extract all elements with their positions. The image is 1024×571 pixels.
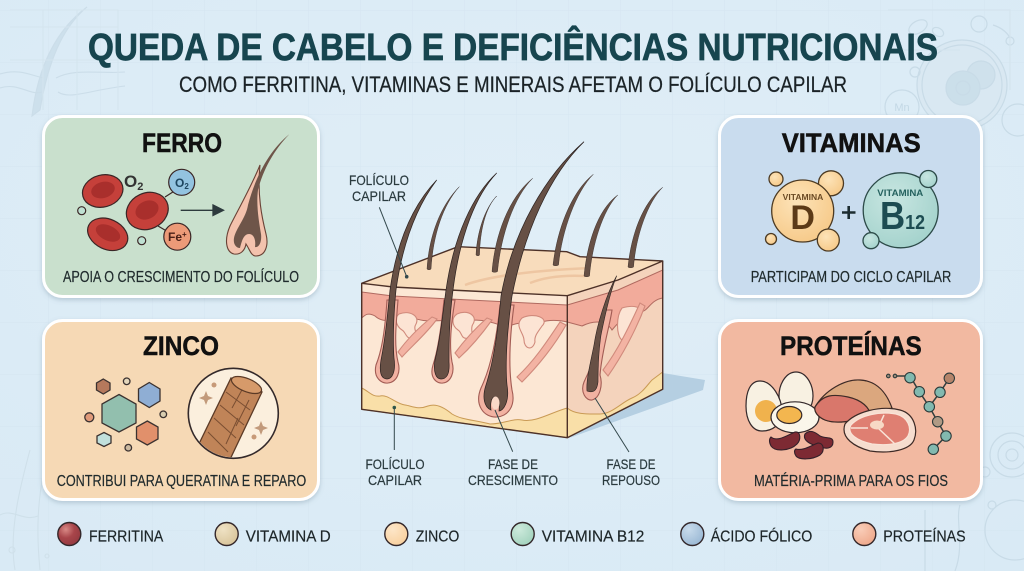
icon: red blood cells with oxygen and iron: [78, 169, 195, 257]
follicle: large growth phase: [479, 142, 584, 417]
label: O2: 2: [137, 181, 143, 193]
icon: vitamin D capsule: [766, 171, 844, 251]
follicle: right resting phase: [583, 276, 617, 400]
panel: ferro: [44, 116, 318, 296]
label: O2 bubble: O: [175, 176, 184, 190]
legend item: ferritina: [58, 522, 164, 546]
legend item: proteinas: PROTEÍNAS: [883, 526, 966, 546]
label: Fe: +: [182, 230, 187, 239]
icon: plus sign: [842, 206, 856, 219]
heading: zinco: ZINCO: [143, 331, 219, 361]
label: fase de repouso: [595, 398, 660, 488]
legend item: ferritina: FERRITINA: [89, 528, 164, 546]
background: follicle sketch bottom left: [0, 450, 49, 570]
arrow: [181, 205, 224, 216]
label: foliculo capilar bottom: CAPILAR: [368, 472, 422, 488]
surface shading: [465, 268, 590, 285]
heading: vitaminas: VITAMINAS: [782, 128, 921, 158]
skin right face: [567, 261, 663, 438]
label: B12: B12: [880, 195, 925, 238]
icon: mineral crystals: [85, 378, 167, 451]
heading: proteinas: PROTEÍNAS: [780, 330, 922, 361]
label: fase de crescimento: CRESCIMENTO: [468, 472, 558, 488]
label: foliculo capilar top: FOLÍCULO: [349, 172, 409, 188]
caption: vitaminas: PARTICIPAM DO CICLO CAPILAR: [751, 269, 951, 286]
legend item: zinco: [385, 522, 459, 546]
hairs on the surface: [427, 174, 663, 277]
icon: amino acid chain: [886, 372, 954, 454]
background: cells bottom right: [925, 433, 1024, 571]
label: letter D: D: [790, 199, 815, 237]
label: fase de repouso: REPOUSO: [602, 472, 660, 488]
panel: zinco: [44, 320, 318, 500]
caption: ferro: APOIA O CRESCIMENTO DO FOLÍCULO: [63, 269, 299, 286]
background: cells top right: [885, 10, 1024, 136]
panel: proteinas: [720, 320, 982, 500]
label: foliculo capilar bottom: FOLÍCULO: [366, 456, 425, 472]
legend item: vitamina d: [215, 522, 331, 546]
background: cells top right: Mn: [894, 102, 910, 114]
label: vitamina b12 small: VITAMINA: [877, 188, 923, 199]
label: fase de crescimento: [468, 410, 558, 488]
legend item: vitamina d: VITAMINA D: [246, 528, 331, 546]
icon: keratin hair strand: [188, 368, 278, 470]
icon: vitamin B12 capsule: [863, 170, 938, 249]
follicle: middle: [432, 173, 497, 383]
label: vitamina d small: VITAMINA: [783, 192, 823, 202]
heading: ferro: FERRO: [142, 128, 222, 158]
icon: eggs: [746, 372, 819, 433]
label: O2: O: [124, 172, 137, 191]
sebaceous glands and muscles: [396, 303, 645, 382]
fat layer: [362, 372, 663, 438]
icon: roast meat: [815, 380, 892, 422]
follicle: left: [375, 180, 437, 383]
label: Fe: Fe: [168, 230, 182, 244]
icon: steak: [844, 408, 916, 452]
block shadow: [570, 373, 705, 438]
dermis band: [362, 270, 663, 330]
legend item: proteinas: [853, 522, 966, 546]
legend item: acido folico: [681, 522, 812, 546]
legend item: vitamina b12: [511, 522, 644, 546]
icon: beans: [770, 431, 833, 459]
background: hair and skin sketch top left: [0, 7, 125, 116]
label: foliculo capilar top: CAPILAR: [352, 188, 406, 204]
central diagram: skin cross-section block: [362, 142, 705, 438]
label: foliculo capilar top: [349, 172, 409, 279]
label: fase de crescimento: FASE DE: [488, 456, 538, 472]
label: fase de repouso: FASE DE: [606, 456, 656, 472]
skin front face: [362, 283, 567, 438]
icon: hair follicle: [227, 134, 289, 256]
legend item: acido folico: ÁCIDO FÓLICO: [711, 526, 812, 546]
caption: proteinas: MATÉRIA-PRIMA PARA OS FIOS: [754, 473, 948, 490]
subtitle: COMO FERRITINA, VITAMINAS E MINERAIS AFETAM O FOLÍCULO CAPILAR: [179, 72, 847, 97]
label: O2 bubble: 2: [184, 182, 189, 191]
skin top surface: [362, 247, 663, 296]
legend: [58, 522, 966, 546]
label: foliculo capilar bottom: [366, 406, 425, 488]
caption: zinco: CONTRIBUI PARA QUERATINA E REPARO: [57, 473, 306, 490]
panel: vitaminas: [720, 116, 982, 296]
legend item: vitamina b12: VITAMINA B12: [542, 528, 644, 546]
legend item: zinco: ZINCO: [416, 528, 459, 546]
block outline: [362, 261, 663, 438]
